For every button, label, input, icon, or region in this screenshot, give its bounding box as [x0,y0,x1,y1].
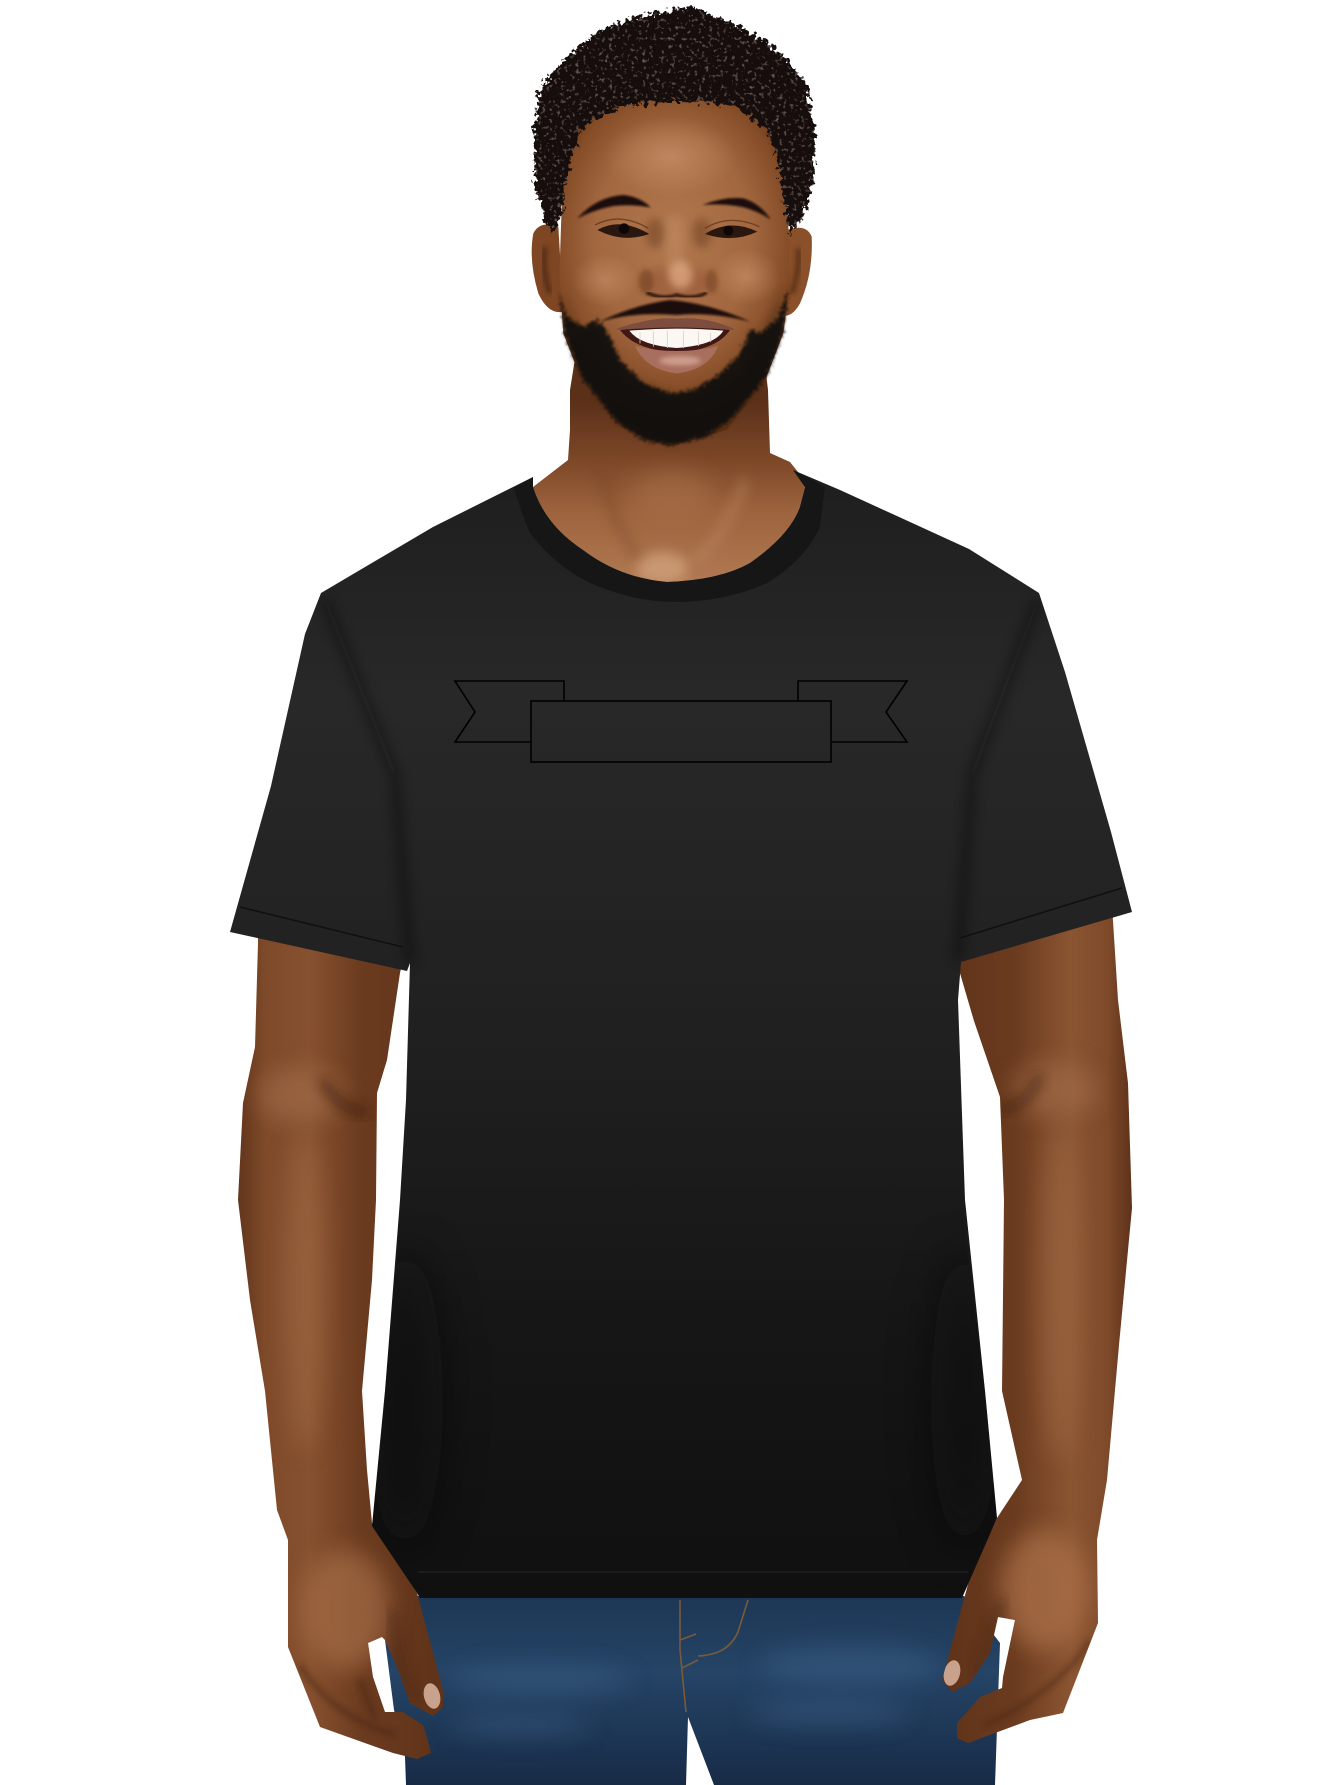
jeans fading whiskers [450,1647,940,1735]
jeans [385,1596,1000,1785]
ribbon right tail [798,681,907,742]
right forearm highlight [1040,1120,1080,1460]
left thumb shade [393,1610,415,1700]
left elbow crease [322,1080,368,1112]
beard [559,290,788,445]
right inner elbow [1013,1062,1097,1118]
ribbon left tail [455,681,564,742]
arm and hand: right [935,900,1135,1750]
left back-of-hand highlight [300,1550,390,1670]
head [532,7,815,447]
right back-of-hand highlight [1000,1530,1090,1650]
lower lip [635,346,718,373]
arm and hand: left [230,920,450,1770]
black t-shirt [230,470,1132,1598]
cheek highlight right [713,248,780,305]
left finger shade [300,1665,395,1735]
eye right [705,220,759,238]
neck tendon left [600,470,640,560]
brow left [577,195,651,218]
illustration: smiling man wearing black t-shirt [230,5,1132,1785]
face skin [559,87,790,447]
moustache [600,300,750,322]
mouth interior [620,327,730,353]
adam's apple [632,471,712,519]
forehead highlight [603,117,737,197]
ribbon centre panel [531,701,831,762]
ear left [532,224,563,312]
sleeve and body shading [325,600,1038,1550]
left thumb nail [424,1683,440,1709]
teeth [629,329,723,348]
collar band [514,470,825,602]
ear right [782,228,812,316]
upper lip [615,318,735,331]
cuff seams and hem stitch [240,888,1122,1572]
right elbow crease [1000,1075,1040,1108]
eye socket shade [646,218,711,248]
neck tendon right [695,480,745,562]
right thumb nail [944,1660,960,1686]
eye left [595,219,649,238]
left inner elbow [258,1067,342,1123]
neck [533,340,806,584]
left forearm highlight [285,1130,325,1450]
hair [533,7,815,235]
right thumb shade [975,1600,1002,1680]
nose [639,217,718,297]
ribbon banner outline [455,681,907,762]
brow right [703,198,771,219]
cheek highlight left [572,253,638,307]
lower lip highlight [659,356,701,365]
stubble shadow [565,287,785,442]
jeans fly stitching [680,1600,748,1712]
right finger shade [985,1640,1090,1725]
sternal notch highlight [636,552,688,584]
